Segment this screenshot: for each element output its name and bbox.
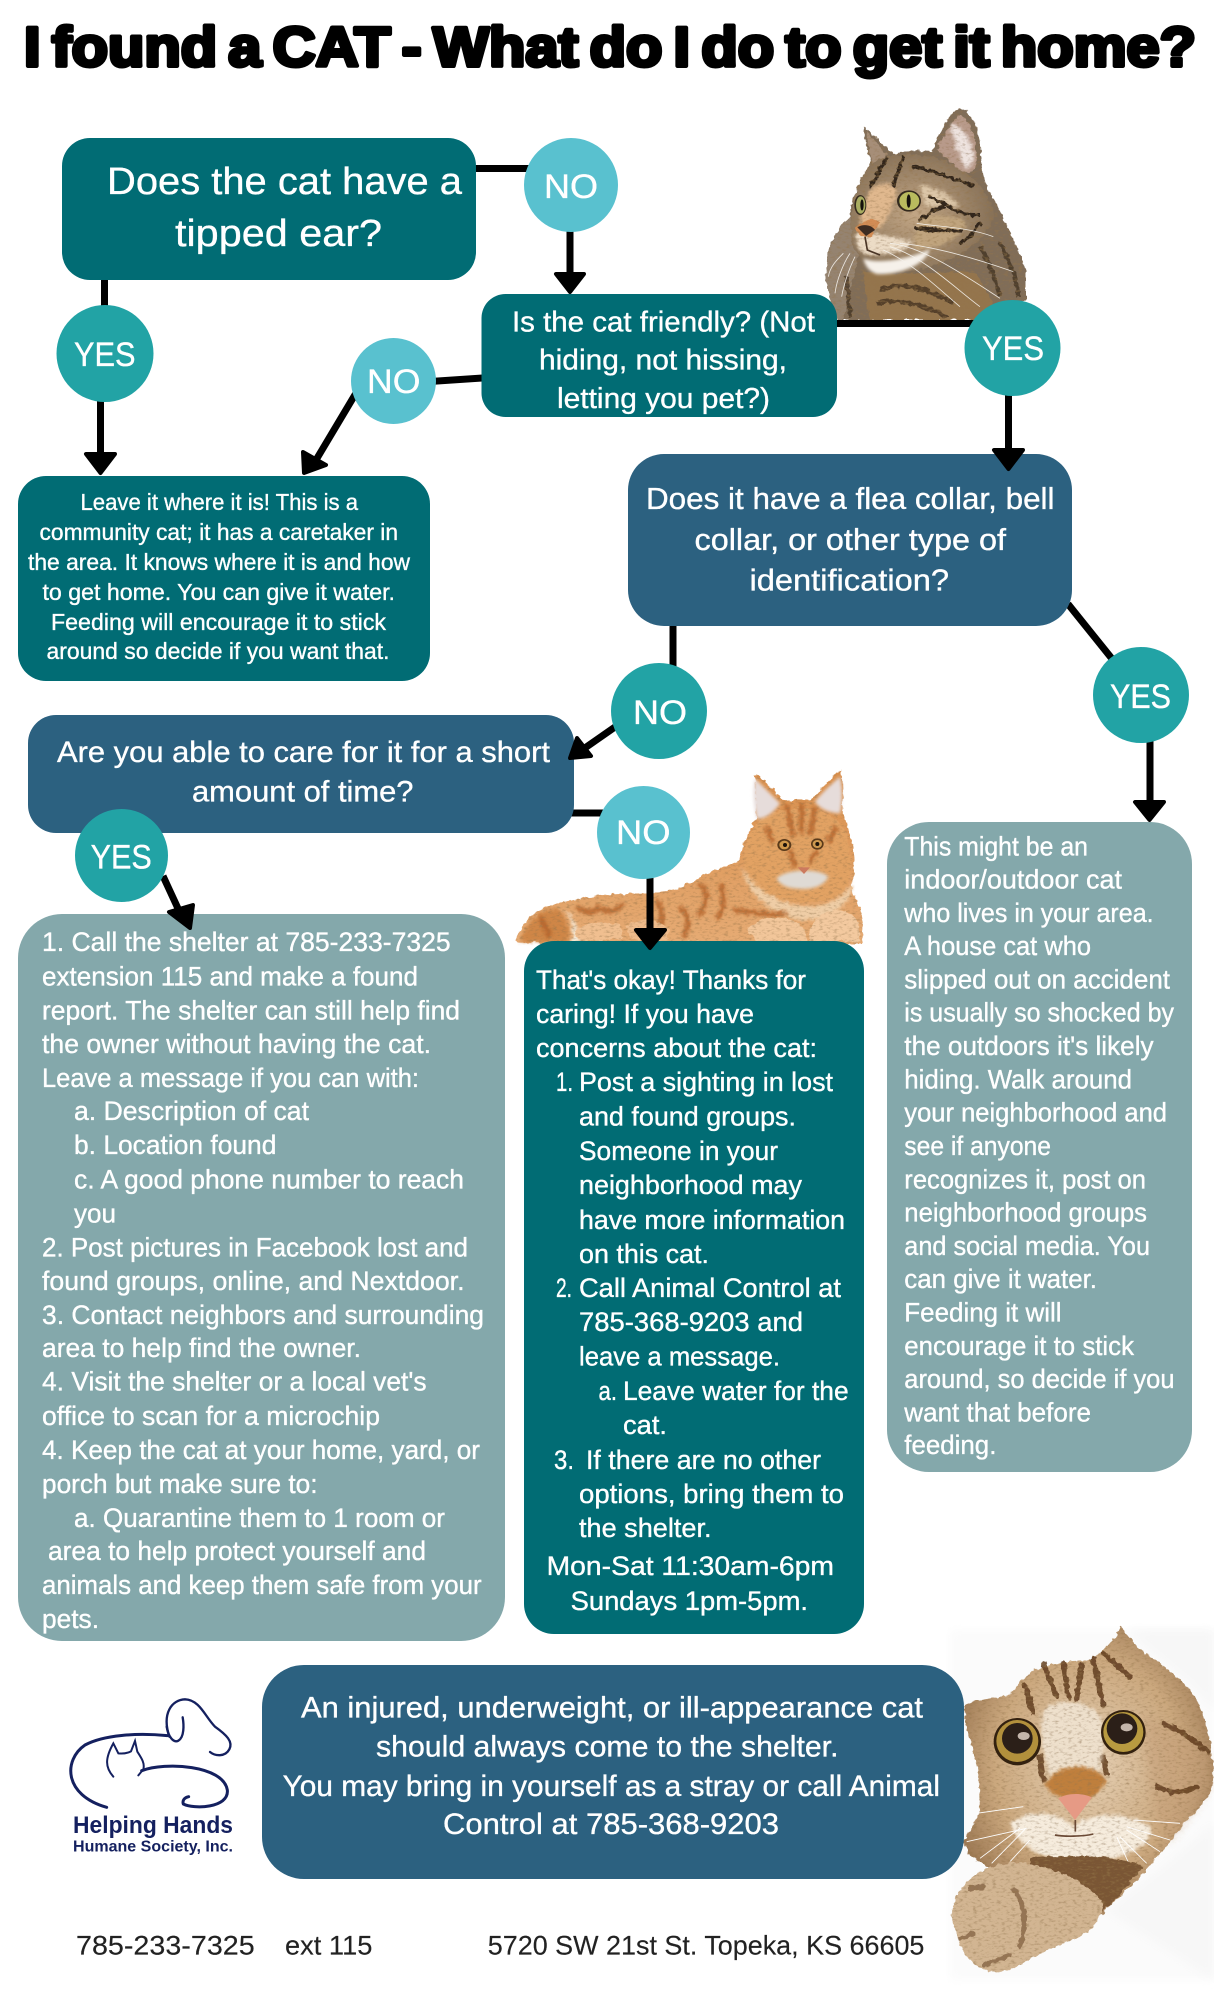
panel: that's okay steps: If there are no other — [586, 1445, 821, 1475]
panel: call the shelter steps: 1. Call the shelter at 785-233-7325 — [42, 927, 451, 957]
panel: leave it where it is: to get home. You can give it water. — [42, 579, 395, 605]
panel: indoor/outdoor cat: and social media. You — [904, 1231, 1150, 1261]
badge: YES, care — [75, 809, 168, 902]
panel: indoor/outdoor cat: your neighborhood and — [904, 1098, 1167, 1128]
connector: flea box to YES — [1068, 604, 1113, 660]
panel: that's okay steps: Mon-Sat 11:30am-6pm — [547, 1551, 834, 1581]
panel: call the shelter steps: c. A good phone number to reach — [74, 1165, 464, 1195]
badge: YES, collar: YES — [1110, 678, 1171, 716]
panel: that's okay steps: caring! If you have — [536, 999, 754, 1029]
panel: that's okay steps: neighborhood may — [579, 1170, 803, 1200]
logo: Helping Hands Humane Society — [71, 1699, 233, 1856]
panel: call the shelter steps: report. The shelter can still help find — [42, 995, 460, 1025]
connector: flea box to NO — [670, 620, 676, 668]
panel: that's okay steps — [524, 941, 864, 1634]
badge: YES, tipped ear: YES — [74, 336, 136, 374]
panel: indoor/outdoor cat: Feeding it will — [904, 1298, 1062, 1328]
panel: call the shelter steps: 2. Post pictures in Facebook lost and — [42, 1232, 468, 1262]
panel: flea collar question — [628, 454, 1072, 626]
panel: that's okay steps: Sundays 1pm-5pm. — [571, 1586, 808, 1616]
panel: that's okay steps: concerns about the cat: — [536, 1033, 817, 1063]
panel: that's okay steps: on this cat. — [579, 1239, 709, 1269]
panel: leave it where it is: community cat; it has a caretaker in — [40, 519, 398, 545]
footer: phone — [76, 1930, 372, 1960]
connector: tipped ear box to YES — [101, 275, 108, 310]
arrow: NO to friendly question — [556, 228, 584, 292]
badge: NO, care: NO — [616, 814, 670, 852]
connector: tipped ear box to NO — [470, 165, 530, 172]
panel: that's okay steps: have more information — [579, 1205, 845, 1235]
panel: that's okay steps: 2. — [556, 1273, 572, 1303]
panel: leave it where it is: the area. It knows where it is and how — [28, 549, 410, 575]
arrow: NO to that's okay — [636, 876, 665, 948]
panel: that's okay steps: Call Animal Control at — [579, 1273, 842, 1303]
title: I found a CAT - What do I do to get it home? — [24, 15, 1196, 78]
panel: that's okay steps: Leave water for the — [623, 1376, 849, 1406]
panel: call the shelter steps: a. Description of cat — [74, 1096, 310, 1126]
panel: leave it where it is: Leave it where it is! This is a — [80, 489, 358, 515]
badge: YES, collar — [1093, 647, 1189, 743]
badge: NO, friendly: NO — [367, 363, 420, 401]
panel: indoor/outdoor cat: see if anyone — [904, 1131, 1051, 1161]
panel: that's okay steps: Post a sighting in lost — [579, 1067, 834, 1097]
panel: call the shelter steps: you — [74, 1198, 116, 1228]
connector: friendly box to NO — [430, 374, 490, 385]
badge: NO, tipped ear — [524, 138, 618, 232]
badge: YES, care: YES — [91, 838, 152, 876]
illustration: ginger cat — [515, 770, 863, 944]
panel: able to care question — [28, 715, 574, 833]
arrowhead: YES to flea collar — [994, 450, 1023, 469]
panel: call the shelter steps: a. Quarantine them to 1 room or — [74, 1503, 445, 1533]
panel: call the shelter steps: 3. Contact neighbors and surrounding — [42, 1300, 484, 1330]
panel: flea collar question: identification? — [750, 562, 949, 598]
badge: NO, friendly — [351, 338, 436, 424]
panel: friendly question: hiding, not hissing, — [539, 344, 787, 376]
logo: Helping Hands Humane Society: Helping Hands — [73, 1812, 233, 1839]
badge: NO, collar — [611, 663, 707, 759]
arrow: NO to leave it — [303, 393, 356, 473]
panel: indoor/outdoor cat: A house cat who — [904, 931, 1091, 961]
connector: friendly box to YES — [830, 320, 980, 327]
panel: injured cat notice: You may bring in yourself as a stray or call Animal — [283, 1770, 940, 1803]
panel: injured cat notice: Control at 785-368-9203 — [443, 1808, 779, 1841]
panel: injured cat notice: should always come to the shelter. — [376, 1731, 838, 1764]
panel: call the shelter steps: the owner without having the cat. — [42, 1029, 431, 1059]
panel: call the shelter steps: area to help find the owner. — [42, 1333, 361, 1363]
panel: indoor/outdoor cat: want that before — [903, 1397, 1091, 1427]
connector: YES to flea collar question — [1005, 394, 1012, 454]
badge: NO, tipped ear: NO — [544, 168, 598, 206]
panel: that's okay steps: 785-368-9203 and — [579, 1307, 803, 1337]
panel: call the shelter steps: pets. — [42, 1604, 99, 1634]
panel: injured cat notice — [262, 1665, 964, 1879]
logo: Helping Hands Humane Society: Humane Society, Inc. — [73, 1839, 233, 1856]
panel: call the shelter steps: found groups, online, and Nextdoor. — [42, 1266, 464, 1296]
badge: YES, friendly — [964, 300, 1060, 396]
panel: that's okay steps: That's okay! Thanks for — [536, 965, 806, 995]
panel: indoor/outdoor cat — [887, 822, 1192, 1472]
panel: call the shelter steps: 4. Keep the cat at your home, yard, or — [42, 1435, 480, 1465]
connector: care box to NO — [570, 810, 605, 816]
panel: injured cat notice: An injured, underweight, or ill-appearance cat — [301, 1691, 924, 1724]
panel: call the shelter steps: Leave a message if you can with: — [42, 1063, 419, 1093]
panel: tipped ear question: tipped ear? — [175, 213, 382, 255]
panel: tipped ear question: Does the cat have a — [107, 161, 463, 203]
panel: indoor/outdoor cat: the outdoors it's likely — [904, 1031, 1154, 1061]
panel: call the shelter steps: b. Location found — [74, 1130, 276, 1160]
panel: indoor/outdoor cat: feeding. — [904, 1430, 996, 1460]
panel: that's okay steps: the shelter. — [579, 1513, 712, 1543]
panel: that's okay steps: 3. — [554, 1445, 574, 1475]
panel: able to care question: Are you able to care for it for a short — [57, 736, 551, 769]
panel: indoor/outdoor cat: slipped out on accident — [904, 965, 1171, 995]
panel: flea collar question: collar, or other type of — [694, 522, 1006, 557]
panel: call the shelter steps — [18, 914, 505, 1641]
panel: friendly question: Is the cat friendly? (Not — [512, 306, 815, 338]
badge: YES, tipped ear — [56, 305, 154, 402]
badge: YES, friendly: YES — [982, 330, 1044, 368]
panel: leave it where it is: around so decide if you want that. — [46, 638, 390, 664]
arrow: YES to indoor/outdoor panel — [1135, 740, 1164, 820]
panel: friendly question — [482, 294, 837, 417]
panel: that's okay steps: Someone in your — [579, 1136, 778, 1166]
arrow: NO to able to care — [570, 727, 615, 758]
panel: call the shelter steps: animals and keep them safe from your — [42, 1570, 482, 1600]
badge: NO, collar: NO — [633, 694, 687, 732]
footer: phone: ext 115 — [285, 1930, 372, 1960]
panel: that's okay steps: cat. — [623, 1410, 667, 1440]
arrow: YES to call the shelter — [163, 876, 193, 928]
panel: indoor/outdoor cat: hiding. Walk around — [904, 1065, 1132, 1095]
panel: indoor/outdoor cat: indoor/outdoor cat — [904, 865, 1123, 895]
panel: that's okay steps: leave a message. — [579, 1342, 780, 1372]
panel: that's okay steps: 1. — [556, 1067, 573, 1097]
footer: phone: 785-233-7325 — [76, 1930, 255, 1960]
panel: that's okay steps: and found groups. — [579, 1102, 796, 1132]
panel: that's okay steps: a. — [598, 1376, 617, 1406]
logo mark: dog and cat — [71, 1699, 230, 1807]
footer: address: 5720 SW 21st St. Topeka, KS 66605 — [488, 1930, 924, 1960]
arrow: YES to leave it — [86, 400, 115, 473]
illustration: tabby cat — [826, 108, 1026, 320]
panel: indoor/outdoor cat: who lives in your area. — [903, 898, 1154, 928]
panel: call the shelter steps: office to scan for a microchip — [42, 1401, 380, 1431]
panel: indoor/outdoor cat: is usually so shocked by — [904, 998, 1175, 1028]
panel: indoor/outdoor cat: neighborhood groups — [904, 1198, 1147, 1228]
badge: NO, care — [597, 786, 690, 879]
panel: indoor/outdoor cat: recognizes it, post on — [904, 1165, 1146, 1195]
panel: call the shelter steps: extension 115 and make a found — [42, 961, 418, 991]
panel: call the shelter steps: 4. Visit the shelter or a local vet's — [42, 1367, 427, 1397]
panel: flea collar question: Does it have a flea collar, bell — [646, 481, 1054, 516]
panel: indoor/outdoor cat: around, so decide if you — [904, 1364, 1174, 1394]
panel: tipped ear question — [62, 138, 476, 280]
panel: leave it where it is: Feeding will encourage it to stick — [51, 609, 387, 635]
panel: leave it where it is — [18, 476, 430, 681]
panel: call the shelter steps: area to help protect yourself and — [48, 1536, 426, 1566]
illustration: cat peeking through torn paper — [950, 1627, 1214, 1980]
panel: able to care question: amount of time? — [192, 776, 414, 808]
panel: indoor/outdoor cat: can give it water. — [904, 1264, 1097, 1294]
panel: friendly question: letting you pet?) — [557, 383, 770, 415]
panel: call the shelter steps: porch but make sure to: — [42, 1469, 318, 1499]
panel: that's okay steps: options, bring them to — [579, 1479, 844, 1509]
panel: indoor/outdoor cat: This might be an — [904, 832, 1088, 862]
panel: indoor/outdoor cat: encourage it to stick — [904, 1331, 1135, 1361]
